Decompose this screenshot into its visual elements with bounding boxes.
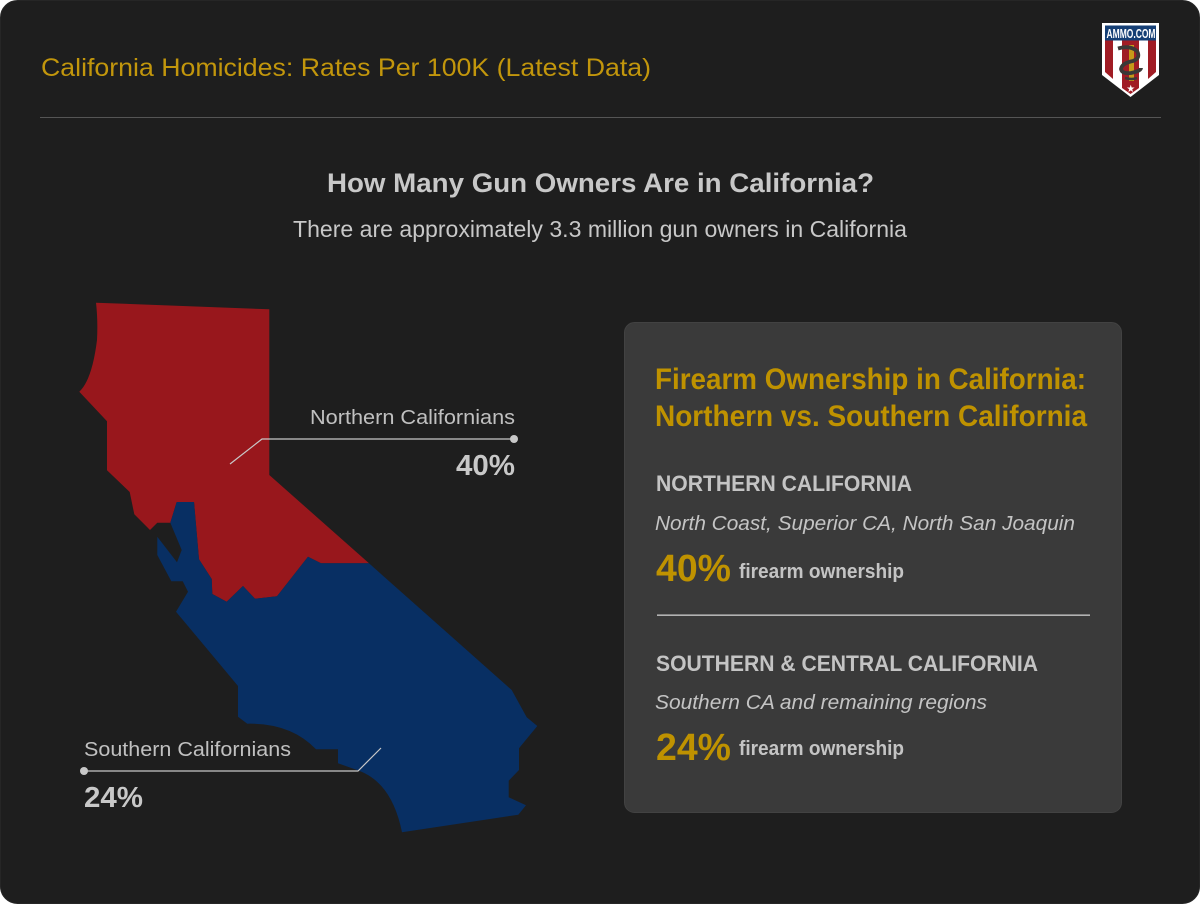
callout: northern Californians: 40%	[456, 450, 515, 482]
callout: southern Californians: 24%	[84, 782, 143, 814]
callout: northern Californians	[230, 407, 518, 482]
logo: ammo.com shield: ★	[1126, 84, 1135, 95]
logo: ammo.com shield	[1102, 23, 1159, 97]
region: southern California	[157, 502, 537, 832]
panel heading	[655, 363, 1087, 433]
main heading: How Many Gun Owners Are in California?	[327, 168, 874, 198]
chart title: California Homicides: Rates Per 100K (Latest Data)	[41, 54, 651, 82]
northern California section: NORTHERN CALIFORNIA	[656, 471, 912, 496]
northern California section: North Coast, Superior CA, North San Joaquin	[655, 513, 1075, 535]
region: northern California	[79, 303, 369, 602]
southern and central California section: firearm ownership	[739, 738, 904, 760]
header divider	[40, 117, 1161, 118]
northern California section	[655, 471, 1075, 590]
logo: ammo.com shield: AMMO.COM	[1106, 26, 1156, 41]
callout: southern Californians: Southern Californians	[84, 739, 291, 761]
northern California section: 40%	[656, 548, 731, 590]
panel heading: Firearm Ownership in California:	[655, 363, 1086, 396]
southern and central California section: 24%	[656, 727, 731, 769]
southern and central California section: SOUTHERN & CENTRAL CALIFORNIA	[656, 651, 1038, 676]
northern California section: firearm ownership	[739, 561, 904, 583]
callout: southern Californians	[80, 739, 381, 814]
map of California	[79, 303, 537, 832]
subheading: There are approximately 3.3 million gun owners in California	[293, 216, 907, 242]
callout: northern Californians: Northern Californians	[310, 407, 515, 429]
section divider	[657, 614, 1090, 616]
southern and central California section	[655, 651, 1038, 769]
southern and central California section: Southern CA and remaining regions	[655, 692, 987, 714]
panel: firearm ownership	[624, 322, 1122, 812]
panel heading: Northern vs. Southern California	[655, 400, 1087, 433]
